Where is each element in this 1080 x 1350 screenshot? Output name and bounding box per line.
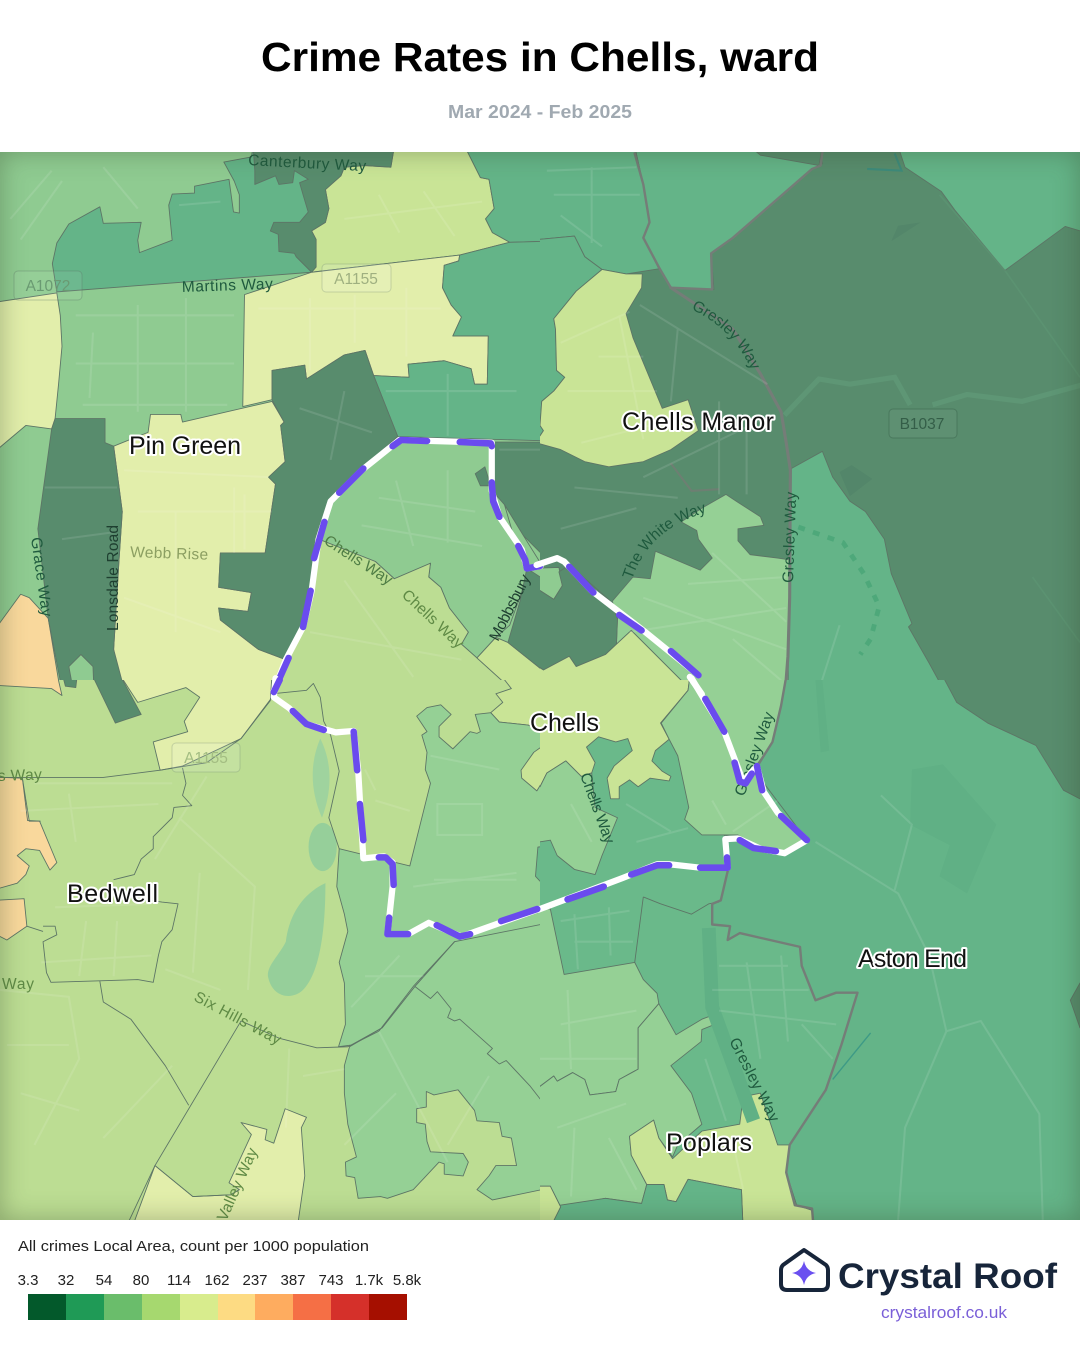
road shields: A1072 (26, 278, 70, 295)
road names: Six Hills Way (191, 989, 284, 1049)
legend scale labels: 114 (167, 1272, 191, 1289)
road shields: B1037 (900, 416, 944, 433)
road names: Lonsdale Road (105, 525, 122, 631)
place labels (67, 408, 967, 1157)
title: Crime Rates in Chells, ward (261, 34, 819, 80)
place labels: Aston End (858, 945, 967, 973)
road names: Chells Way (321, 532, 396, 589)
road names: Webb Rise (130, 544, 208, 564)
place labels: Chells (530, 709, 599, 737)
map quadrant: south-east areas (540, 680, 1080, 1220)
road names: Martins Way (182, 276, 273, 296)
map quadrant: north-east areas (540, 152, 1080, 680)
legend scale labels: 237 (242, 1272, 268, 1289)
legend scale labels: 387 (280, 1272, 306, 1289)
legend scale labels (18, 1272, 422, 1289)
map quadrant: south-west areas (0, 680, 540, 1220)
icon: Crystal Roof house logo (781, 1250, 828, 1290)
road names: Chells Way (576, 771, 618, 846)
road shields: A1155 (184, 750, 228, 767)
header: title and date range (261, 34, 819, 122)
legend title: All crimes Local Area, count per 1000 population (18, 1238, 369, 1255)
legend scale labels: 54 (96, 1272, 112, 1289)
road names: Grace Way (27, 536, 55, 618)
legend scale labels: 3.3 (18, 1272, 38, 1289)
legend scale labels: 162 (204, 1272, 230, 1289)
legend scale labels: 5.8k (393, 1272, 422, 1289)
road names: Gresley Way (694, 302, 759, 368)
place labels: Poplars (666, 1129, 752, 1157)
road shields (14, 264, 957, 772)
road names: Gresley Way (725, 1035, 782, 1125)
road names: Gresley Way (780, 491, 800, 583)
logo website link: crystalroof.co.uk (881, 1304, 1008, 1322)
subtitle: date range: Mar 2024 - Feb 2025 (448, 102, 632, 122)
legend scale labels: 1.7k (355, 1272, 384, 1289)
road names (0, 152, 805, 1264)
road names: Mobbsbury (486, 572, 534, 644)
road shields: A1155 (334, 271, 378, 288)
road names: Gresley Way (732, 710, 778, 798)
road names: Chells Way (398, 586, 467, 652)
footer: legend and logo (18, 1238, 1058, 1322)
legend scale labels: 80 (133, 1272, 149, 1289)
legend scale labels: 32 (58, 1272, 74, 1289)
place labels: Chells Manor (622, 408, 774, 436)
panel: choropleth map (0, 152, 1080, 1220)
ward boundary: Chells dashed outline (274, 440, 807, 937)
logo wordmark: Crystal Roof (838, 1257, 1057, 1296)
map edge vignette (0, 152, 1080, 1220)
legend colour bar (28, 1294, 407, 1320)
place labels: Bedwell (67, 880, 158, 908)
place labels: Pin Green (129, 432, 241, 460)
road names: The White Way (622, 504, 704, 576)
map quadrant: north-west areas (0, 152, 540, 680)
legend scale labels: 743 (318, 1272, 344, 1289)
road names: Canterbury Way (248, 152, 367, 175)
road names: Way (2, 976, 34, 993)
